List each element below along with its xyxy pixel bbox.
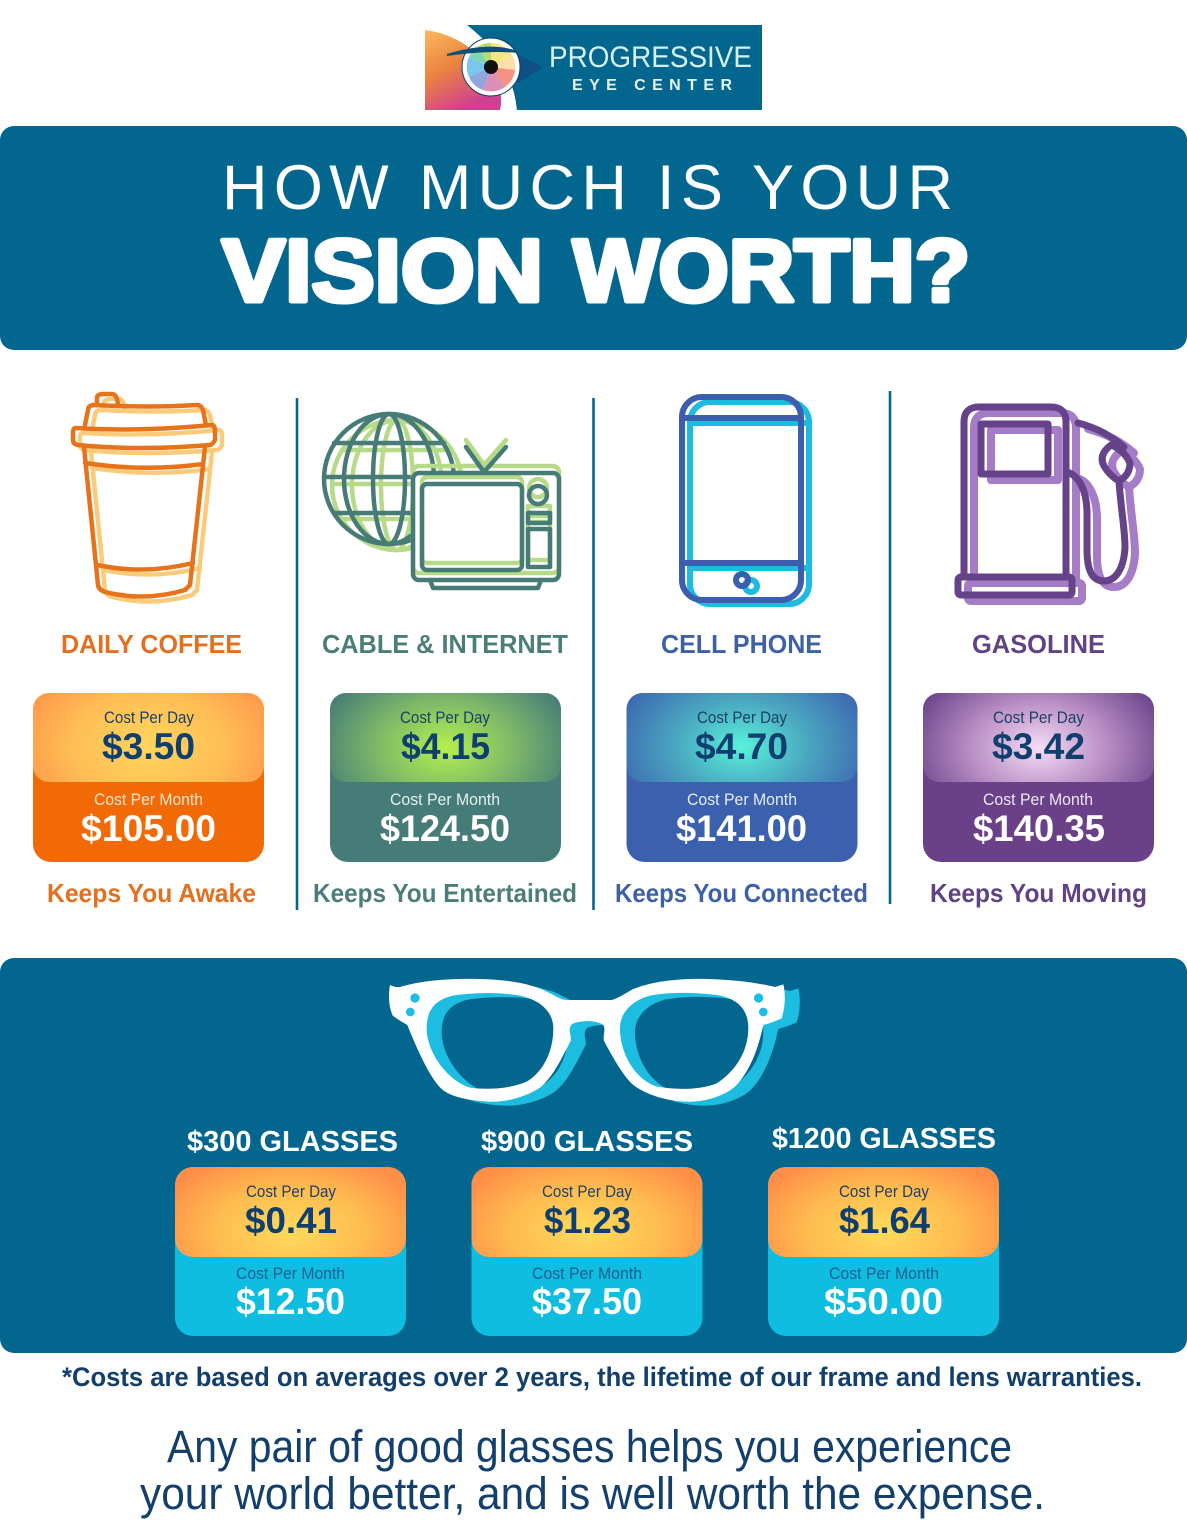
option: $300 glasses	[175, 1126, 406, 1336]
price card: cable: $124.50	[380, 808, 510, 849]
icon: gas pump	[958, 407, 1140, 601]
title banner: WORTH?	[573, 221, 970, 320]
price card: cable: Cost Per Month	[390, 790, 500, 809]
heading: daily coffee: DAILY COFFEE	[61, 629, 242, 659]
option: $1200 glasses	[768, 1123, 999, 1336]
title banner: HOW MUCH IS YOUR	[222, 153, 953, 223]
heading: cell phone: CELL PHONE	[661, 629, 822, 659]
option: $300 glasses: $12.50	[236, 1281, 345, 1322]
tagline: keeps you awake: Keeps You Awake	[47, 878, 256, 908]
icon: coffee cup	[73, 394, 222, 602]
column: daily coffee	[33, 394, 264, 908]
price card: cable	[330, 693, 561, 862]
price card: coffee: $105.00	[81, 808, 216, 849]
icon: white glasses	[389, 979, 800, 1106]
option: $900 glasses: Cost Per Month	[532, 1264, 642, 1283]
price card: cell phone: Cost Per Day	[697, 708, 787, 727]
price card: coffee: Cost Per Month	[94, 790, 203, 809]
option: $900 glasses: $1.23	[544, 1200, 631, 1241]
icon: globe and television	[324, 414, 559, 588]
price card: gasoline: $3.42	[992, 726, 1085, 767]
closing statement: your world better, and is well worth the expense.	[140, 1468, 1045, 1519]
option: $1200 glasses: Cost Per Day	[839, 1182, 929, 1201]
price card: coffee: Cost Per Day	[104, 708, 194, 727]
column: cell phone	[615, 397, 868, 908]
option: $300 glasses: $300 GLASSES	[187, 1126, 398, 1158]
price card: coffee: $3.50	[102, 726, 195, 767]
option: $1200 glasses: $50.00	[824, 1281, 943, 1322]
heading: gasoline: GASOLINE	[972, 629, 1105, 659]
logo: Progressive Eye Center: PROGRESSIVE	[549, 41, 752, 74]
title banner	[0, 126, 1187, 350]
column: cable and internet	[313, 414, 577, 908]
tagline: keeps you moving: Keeps You Moving	[930, 878, 1147, 908]
option: $900 glasses	[472, 1126, 702, 1336]
logo: Progressive Eye Center	[425, 25, 762, 110]
option: $300 glasses: Cost Per Month	[236, 1264, 345, 1283]
closing statement: Any pair of good glasses helps you experience	[167, 1421, 1012, 1472]
price card: cell phone	[626, 693, 858, 862]
option: $1200 glasses: Cost Per Month	[829, 1264, 939, 1283]
footnote: *Costs are based on averages over 2 years, the lifetime of our frame and lens warranties.	[62, 1362, 1142, 1392]
option: $900 glasses: $37.50	[532, 1281, 642, 1322]
price card: gasoline	[923, 693, 1154, 862]
option: $900 glasses: $900 GLASSES	[481, 1126, 693, 1158]
option: $900 glasses: Cost Per Day	[542, 1182, 632, 1201]
option: $1200 glasses: $1200 GLASSES	[772, 1123, 996, 1155]
price card: gasoline: Cost Per Month	[983, 790, 1093, 809]
closing statement	[140, 1421, 1045, 1519]
option: $300 glasses: Cost Per Day	[246, 1182, 336, 1201]
logo: Progressive Eye Center: EYE CENTER	[572, 77, 732, 94]
price card: coffee	[33, 693, 264, 862]
title banner: VISION	[222, 221, 543, 320]
option: $1200 glasses: $1.64	[839, 1200, 930, 1241]
price card: cell phone: $141.00	[676, 808, 807, 849]
icon: smartphone	[682, 397, 809, 604]
price card: cell phone: Cost Per Month	[687, 790, 797, 809]
price card: cell phone: $4.70	[695, 726, 788, 767]
tagline: keeps you connected: Keeps You Connected	[615, 878, 868, 908]
heading: cable and internet: CABLE & INTERNET	[322, 629, 568, 659]
column: gasoline	[923, 407, 1154, 908]
price card: gasoline: $140.35	[973, 808, 1105, 849]
price card: cable: $4.15	[401, 726, 490, 767]
panel: glasses costs	[0, 958, 1187, 1353]
tagline: keeps you entertained: Keeps You Entertained	[313, 878, 577, 908]
option: $300 glasses: $0.41	[245, 1200, 337, 1241]
price card: gasoline: Cost Per Day	[993, 708, 1084, 727]
price card: cable: Cost Per Day	[400, 708, 490, 727]
